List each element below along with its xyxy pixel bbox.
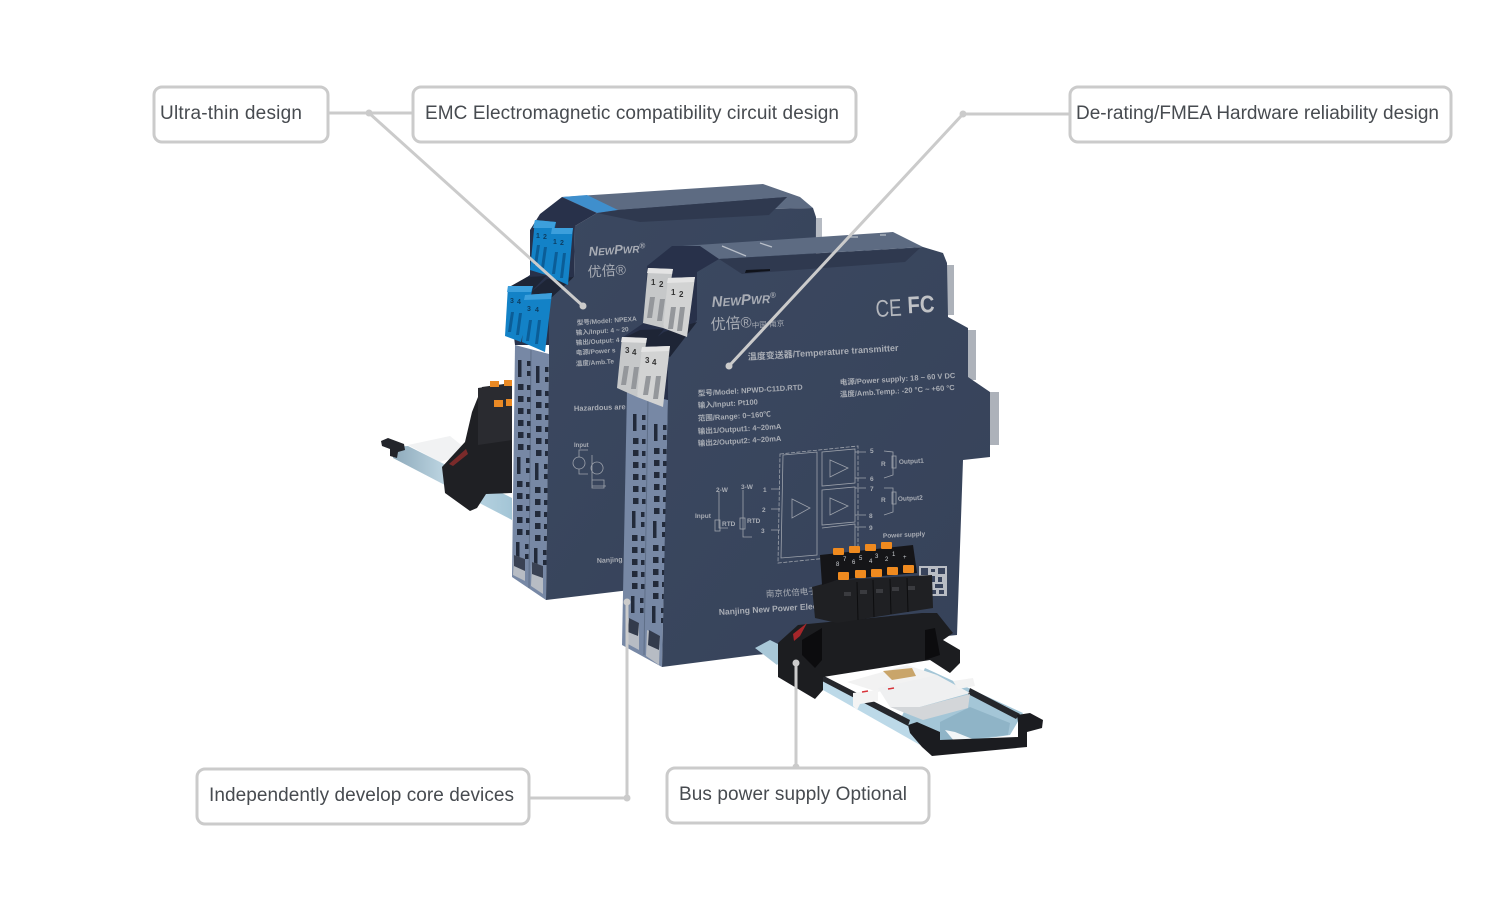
front module wiring diagram: RTD <box>747 518 761 525</box>
front module wiring diagram: 8 <box>869 513 873 520</box>
terminal numbers: 2 <box>679 290 684 299</box>
callout: EMC design <box>413 87 856 142</box>
rear module printed labels: NEWPWR <box>588 242 640 259</box>
front module specification text: 输出2/Output2: 4~20mA <box>698 433 782 448</box>
rail end stop <box>908 713 1043 756</box>
front module recess shading <box>719 248 920 274</box>
front module wiring diagram: 7 <box>870 486 874 493</box>
front DIN rail <box>755 640 1043 756</box>
rear module printed labels: 优倍® <box>587 261 627 280</box>
terminal key numbers: 3 <box>875 554 879 560</box>
rail inner channel <box>900 668 1023 745</box>
front module certification marks: CE <box>875 295 902 323</box>
terminal key numbers: 1 <box>892 552 896 558</box>
callout: core devices: Independently develop core devices <box>209 785 514 806</box>
front module wiring diagram: 3 <box>761 528 765 535</box>
terminal key numbers: 8 <box>836 562 840 568</box>
front module wiring diagram: R <box>881 461 886 468</box>
front module wiring diagram: R <box>881 497 886 504</box>
front module wiring diagram: RTD <box>722 521 736 528</box>
front module wiring diagram <box>695 446 926 563</box>
front module wiring diagram: Power supply <box>883 531 926 540</box>
rail lower strip <box>822 680 920 745</box>
rear module printed labels: 输出/Output: 4 <box>576 335 620 347</box>
front module specification text: 温度/Amb.Temp.: -20 °C ~ +60 °C <box>840 382 956 399</box>
front module specification text: 电源/Power supply: 18 ~ 60 V DC <box>840 370 956 387</box>
terminal numbers: 3 <box>645 356 650 365</box>
terminal numbers: 3 <box>625 346 630 355</box>
front module wiring diagram: Output2 <box>898 495 923 503</box>
callout: bus power supply: Bus power supply Optional <box>679 784 907 805</box>
rear module printed labels <box>574 240 646 565</box>
rear DIN rail <box>381 436 512 520</box>
rear module printed labels: 型号/Model: NPEXA <box>577 314 637 327</box>
blue terminal blocks: 2 <box>543 234 547 241</box>
terminal numbers: 2 <box>659 280 664 289</box>
terminal numbers: 1 <box>651 278 656 287</box>
front module top face <box>682 232 999 445</box>
terminal key numbers: 4 <box>869 559 873 565</box>
terminal key numbers: + <box>903 555 907 561</box>
rear terminal clip <box>442 380 512 511</box>
orange push keys <box>833 542 914 580</box>
rear module printed labels: Nanjing <box>597 557 623 565</box>
front module specification text: 型号/Model: NPWD-C11D.RTD <box>698 382 804 398</box>
callout: bus power supply <box>667 768 929 823</box>
front module <box>617 232 999 667</box>
terminal key numbers: 6 <box>852 560 856 566</box>
black bus connector clip <box>778 613 960 699</box>
front module wiring diagram: 2-W <box>716 487 729 494</box>
connector lines <box>328 113 1069 798</box>
front module wiring diagram: 5 <box>870 448 874 455</box>
front module manufacturer name: Nanjing New Power Electric <box>719 600 831 617</box>
front module wiring diagram: 1 <box>763 487 767 494</box>
front module manufacturer name: 南京优倍电子 <box>766 586 818 599</box>
terminal numbers: 4 <box>652 358 657 367</box>
QR code <box>919 566 947 596</box>
front module brand: 优倍® <box>710 314 752 334</box>
front module wiring diagram: 3-W <box>741 484 754 491</box>
terminal key numbers: 7 <box>843 557 847 563</box>
front connector housing <box>622 246 719 400</box>
blue terminal blocks: 4 <box>517 299 521 306</box>
black terminal block with orange keys <box>812 542 933 623</box>
rear module printed labels: Input <box>574 443 589 449</box>
blue terminal blocks <box>505 220 574 352</box>
front module brand: 中国·南京 <box>751 318 785 330</box>
front module wiring diagram: 6 <box>870 476 874 483</box>
front module specification text: 范围/Range: 0~160℃ <box>698 409 772 423</box>
terminal key numbers: 5 <box>859 556 863 562</box>
callout: core devices <box>197 769 529 824</box>
front module manufacturer name <box>719 586 831 617</box>
rear module <box>505 184 822 600</box>
rear module top face <box>562 184 822 238</box>
front module wiring diagram: Input <box>695 513 712 520</box>
front module specification text: 输出1/Output1: 4~20mA <box>698 421 782 436</box>
terminal key numbers: 2 <box>885 557 889 563</box>
white bus module <box>847 665 975 720</box>
front module specification text: 输入/Input: Pt100 <box>698 396 758 410</box>
callout: ultra-thin design <box>154 87 328 142</box>
front module brand: NEWPWR <box>711 291 771 311</box>
blue terminal blocks: 4 <box>535 307 539 314</box>
callout: EMC design: EMC Electromagnetic compatibility circuit design <box>425 103 839 124</box>
front module certification marks: FC <box>907 291 935 319</box>
rear connector housing <box>508 197 597 345</box>
callout: hardware reliability design <box>1070 87 1451 142</box>
front module side with vent slots <box>622 390 668 667</box>
blue terminal blocks: 2 <box>560 240 564 247</box>
blue terminal blocks: 1 <box>536 233 540 240</box>
callout: hardware reliability design: De-rating/FMEA Hardware reliability design <box>1076 103 1439 124</box>
rear module printed labels: Hazardous are <box>574 402 626 413</box>
rail black edges <box>822 675 910 726</box>
front module brand: ® <box>770 291 776 300</box>
blue terminal blocks: 3 <box>527 306 531 313</box>
rear module front face <box>546 208 816 600</box>
front module front face <box>662 247 990 667</box>
terminal key numbers <box>836 552 907 568</box>
blue terminal blocks: 3 <box>510 298 514 305</box>
front module certification marks <box>875 291 935 323</box>
front module wiring diagram: Output1 <box>899 458 924 466</box>
terminal numbers <box>625 278 684 367</box>
blue terminal blocks: 1 <box>553 239 557 246</box>
front module wiring diagram: 9 <box>869 525 873 532</box>
rear module wiring diagram <box>573 450 606 488</box>
callout: ultra-thin design: Ultra-thin design <box>160 103 302 124</box>
rear module side with vent slots <box>512 345 549 600</box>
grey terminal blocks <box>617 268 697 407</box>
front module specification text <box>698 370 956 448</box>
rear module printed labels: 输入/Input: 4 ~ 20 <box>576 324 629 337</box>
connector dots <box>366 110 966 802</box>
rear module printed labels: 温度/Amb.Te <box>576 356 615 368</box>
front module brand <box>710 290 785 334</box>
rear recess <box>597 197 787 222</box>
front module title: 温度变送器/Temperature transmitter <box>747 342 899 362</box>
terminal numbers: 4 <box>632 348 637 357</box>
rear module printed labels: ® <box>639 241 646 250</box>
terminal numbers: 1 <box>671 288 676 297</box>
front module wiring diagram: 2 <box>762 507 766 514</box>
rear module printed labels: 电源/Power s <box>576 345 616 357</box>
